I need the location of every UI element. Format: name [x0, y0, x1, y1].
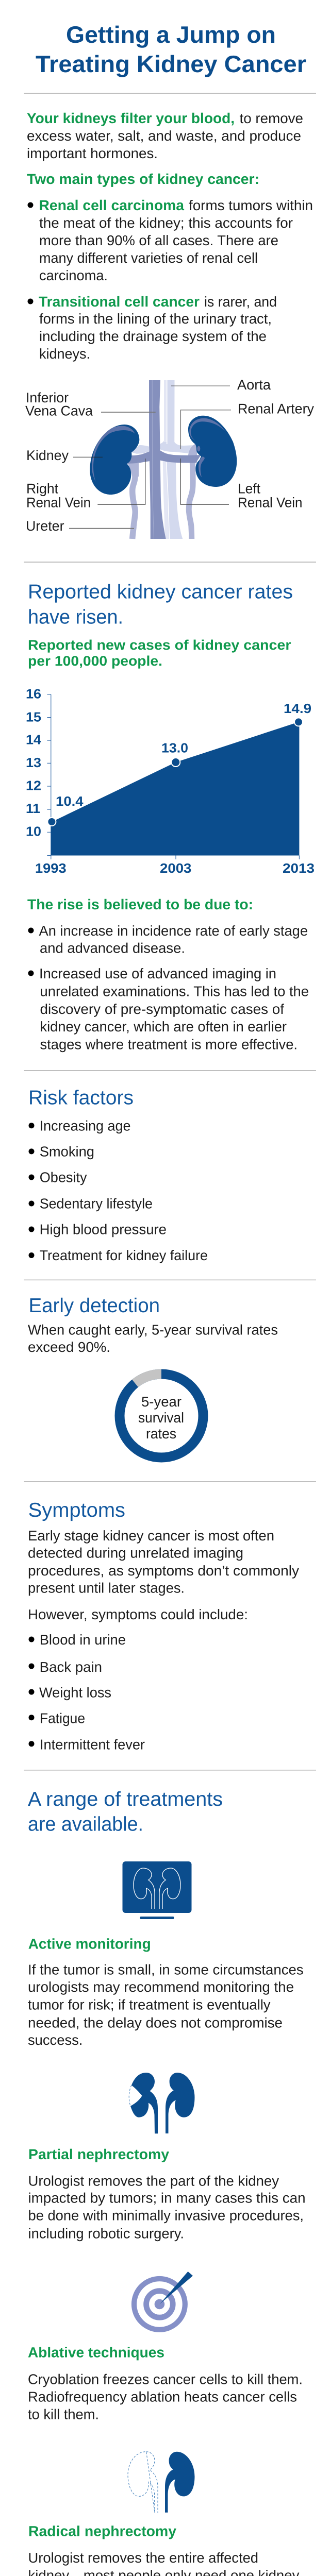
area chart — [26, 686, 315, 876]
y axis labels: 12 — [26, 778, 41, 793]
diagram labels: Renal Artery — [238, 401, 314, 416]
symptoms list: Weight loss — [39, 1684, 111, 1700]
risk factors list — [29, 1118, 208, 1263]
risk factors list: High blood pressure — [40, 1222, 167, 1238]
bullet: renal cell carcinoma: Renal cell carcinoma — [39, 197, 184, 213]
treatment: active monitoring: tumor for risk; if treatment is eventually — [28, 1997, 271, 2012]
reasons list: kidney cancer, which are often in earlier — [40, 1019, 287, 1035]
data labels — [56, 701, 311, 809]
risk factors list: Obesity — [40, 1170, 87, 1185]
icon: right kidney — [90, 425, 139, 495]
treatment: radical nephrectomy — [28, 2523, 302, 2576]
bullet: renal cell carcinoma: more than 90% of all cases. There are — [39, 232, 278, 248]
data points — [47, 718, 303, 826]
y axis labels: 10 — [26, 824, 41, 839]
treatment: active monitoring — [28, 1936, 304, 2048]
bullet: renal cell carcinoma: many different varieties of renal cell — [39, 250, 258, 266]
title: Getting a Jump on — [66, 21, 276, 48]
diagram labels: Renal Vein — [26, 495, 91, 511]
symptoms text — [28, 1528, 299, 1622]
bullet: renal cell carcinoma: forms tumors within — [189, 197, 313, 213]
diagram labels: Kidney — [26, 448, 69, 463]
y axis labels: 15 — [26, 709, 41, 724]
heading: risk factors: Risk factors — [28, 1087, 134, 1109]
data labels: 13.0 — [161, 740, 188, 756]
chart subtitle: per 100,000 people. — [28, 653, 162, 669]
treatment: ablative techniques: Radiofrequency ablation heats cancer cells — [28, 2389, 297, 2405]
y axis labels — [26, 686, 42, 839]
anatomy diagram — [25, 377, 314, 539]
treatment: partial nephrectomy: Partial nephrectomy — [28, 2146, 169, 2162]
y axis labels: 16 — [26, 686, 41, 702]
title: Treating Kidney Cancer — [36, 50, 306, 77]
risk factors list: Smoking — [40, 1143, 94, 1159]
diagram labels: Ureter — [26, 518, 64, 534]
treatment: partial nephrectomy: impacted by tumors; in many cases this can — [28, 2190, 305, 2206]
symptoms list: Blood in urine — [40, 1632, 126, 1648]
diagram labels: Vena Cava — [25, 403, 93, 418]
x axis labels: 1993 — [35, 860, 67, 876]
symptoms text: detected during unrelated imaging — [28, 1545, 243, 1561]
treatment: radical nephrectomy: Radical nephrectomy — [28, 2523, 176, 2539]
data labels: 14.9 — [284, 701, 311, 716]
icon: radical nephrectomy kidneys — [128, 2452, 195, 2513]
diagram labels: Left — [238, 481, 260, 497]
bullet: transitional cell cancer: kidneys. — [39, 346, 90, 362]
reasons list: and advanced disease. — [40, 940, 185, 956]
heading: treatments: A range of treatments — [28, 1788, 223, 1810]
symptoms list — [29, 1632, 145, 1752]
heading: rates have risen — [28, 581, 293, 629]
chart subtitle — [28, 637, 291, 669]
treatment: partial nephrectomy: be done with minimally invasive procedures, — [28, 2208, 304, 2224]
reasons list: stages where treatment is more effective. — [40, 1037, 298, 1053]
callout lines — [69, 386, 231, 529]
diagram labels: Inferior — [26, 390, 69, 405]
diagram labels: Aorta — [237, 377, 271, 393]
bullet: renal cell carcinoma — [28, 197, 313, 283]
icon: left kidney — [188, 416, 237, 487]
bullet: transitional cell cancer: Transitional cell cancer — [39, 294, 200, 310]
donut chart: survival rates: 5-year — [141, 1394, 182, 1410]
treatment: ablative techniques: Ablative techniques — [28, 2344, 164, 2361]
risk factors list: Sedentary lifestyle — [40, 1195, 153, 1212]
treatment: active monitoring: success. — [28, 2032, 82, 2048]
treatment: ablative techniques: to kill them. — [28, 2406, 99, 2422]
reasons list: Increased use of advanced imaging in — [39, 965, 276, 981]
heading: rates have risen: Reported kidney cancer rates — [28, 581, 293, 603]
treatment: active monitoring: urologists may recommend monitoring the — [28, 1979, 294, 1995]
icon: target with dart — [134, 2272, 193, 2330]
treatment: active monitoring: Active monitoring — [28, 1936, 151, 1952]
heading: rates have risen: have risen. — [28, 606, 123, 629]
chart area — [51, 722, 299, 855]
bullet: transitional cell cancer: is rarer, and — [204, 294, 277, 310]
x axis labels: 2003 — [160, 860, 191, 876]
icon: monitor with kidneys — [123, 1861, 192, 1919]
intro text: excess water, salt, and waste, and produce — [27, 128, 301, 144]
title — [36, 21, 306, 77]
icon: partial nephrectomy kidneys — [129, 2073, 195, 2133]
treatment: ablative techniques: Cryoblation freezes cancer cells to kill them. — [28, 2371, 303, 2387]
heading: symptoms: Symptoms — [28, 1499, 125, 1521]
reasons list: discovery of pre-symptomatic cases of — [40, 1001, 284, 1017]
symptoms list: Intermittent fever — [40, 1736, 145, 1752]
symptoms text: present until later stages. — [28, 1580, 185, 1596]
treatment: radical nephrectomy: Urologist removes the entire affected — [28, 2550, 258, 2566]
intro text: important hormones. — [27, 145, 158, 161]
subheading: reasons for the rise: The rise is believed to be due to: — [27, 896, 253, 912]
intro text: Your kidneys filter your blood, — [27, 110, 235, 126]
reasons list: unrelated examinations. This has led to the — [40, 984, 309, 999]
risk factors list: Increasing age — [40, 1118, 131, 1134]
treatment: active monitoring: If the tumor is small, in some circumstances — [28, 1962, 304, 1978]
risk factors list: Treatment for kidney failure — [40, 1247, 208, 1263]
donut chart: survival rates: rates — [146, 1426, 176, 1442]
subheading: two main types: Two main types of kidney cancer: — [27, 171, 259, 187]
bullet: renal cell carcinoma: carcinoma. — [39, 267, 108, 283]
bullet: transitional cell cancer — [28, 294, 277, 362]
bullet: transitional cell cancer: forms in the lining of the urinary tract, — [39, 311, 272, 327]
heading: treatments: are available. — [28, 1814, 143, 1836]
bullet: transitional cell cancer: including the drainage system of the — [39, 328, 267, 344]
y axis labels: 13 — [26, 755, 41, 770]
chart axes — [47, 694, 299, 859]
donut chart: survival rates — [120, 1374, 203, 1458]
reasons list — [28, 923, 309, 1053]
treatment: partial nephrectomy — [28, 2146, 305, 2241]
early detection text: When caught early, 5-year survival rates — [28, 1322, 278, 1338]
data labels: 10.4 — [56, 793, 84, 809]
y axis labels: 11 — [26, 801, 40, 816]
y axis labels: 14 — [26, 732, 42, 748]
reasons list: An increase in incidence rate of early stage — [39, 923, 308, 939]
donut chart: survival rates: survival — [138, 1410, 184, 1426]
treatment: partial nephrectomy: including robotic surgery. — [28, 2225, 184, 2241]
early detection text: exceed 90%. — [28, 1339, 110, 1355]
x axis labels: 2013 — [283, 860, 315, 876]
x axis labels — [35, 860, 315, 876]
icon: ureters — [128, 444, 197, 539]
diagram labels: Renal Vein — [238, 495, 302, 511]
early detection text — [28, 1322, 278, 1355]
diagram labels — [25, 377, 314, 534]
icon: inferior vena cava — [149, 380, 166, 539]
symptoms text: Early stage kidney cancer is most often — [28, 1528, 274, 1544]
treatment: active monitoring: needed, the delay does not compromise — [28, 2015, 283, 2031]
treatment: partial nephrectomy: Urologist removes the part of the kidney — [28, 2173, 279, 2189]
symptoms list: Fatigue — [40, 1710, 85, 1726]
icon: aorta and renal arteries — [131, 380, 195, 539]
symptoms text: procedures, as symptoms don’t commonly — [28, 1563, 299, 1579]
intro text — [27, 110, 303, 161]
symptoms list: Back pain — [40, 1659, 102, 1675]
heading: treatments — [28, 1788, 223, 1836]
icon: renal veins — [127, 450, 201, 464]
diagram labels: Right — [26, 481, 58, 497]
treatment: ablative techniques — [28, 2344, 303, 2422]
chart subtitle: Reported new cases of kidney cancer — [28, 637, 291, 653]
intro text: to remove — [239, 110, 303, 126]
bullet: renal cell carcinoma: the meat of the kidney; this accounts for — [39, 215, 293, 231]
heading: early detection: Early detection — [29, 1295, 160, 1317]
symptoms text: However, symptoms could include: — [28, 1606, 248, 1622]
